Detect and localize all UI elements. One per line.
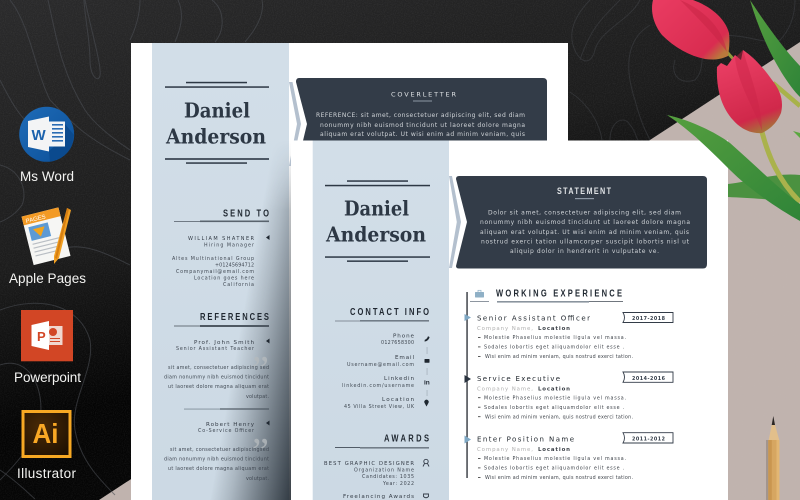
contact info section: 0127658300 (381, 340, 414, 346)
back page references section: Senior Assistant Teacher (176, 346, 254, 352)
lower leaf back (728, 174, 800, 202)
top tulip (652, 0, 729, 60)
job 1: 2017-2018 (632, 316, 666, 322)
label: Illustrator: Illustrator (17, 466, 76, 481)
icon: award ribbon (423, 459, 429, 466)
statement banner: aliquip dolor in hendrerit in vulputate ve. (510, 248, 659, 255)
icon: Powerpoint (21, 310, 73, 361)
front page sidebar (313, 140, 449, 500)
contact info section: Location (382, 397, 414, 403)
job 1: Sodales lobortis eget aliquamdolor elit esse . (484, 344, 624, 350)
job 2: Wisi enim ad minim veniam, quis nostrud exerci tation. (485, 414, 633, 420)
timeline line (466, 292, 468, 478)
back page coverletter banner (296, 78, 547, 170)
back page references section: Robert Henry (206, 422, 255, 428)
job 1 (464, 312, 673, 360)
icon: Powerpoint: P (37, 329, 46, 344)
back resume page (131, 43, 568, 500)
back page name block: Daniel (184, 98, 250, 122)
back page send to section: Hiring Manager (204, 242, 254, 248)
small leaf tip (793, 131, 800, 138)
icon: trophy (424, 494, 428, 498)
statement banner: nonummy nibh euismod tincidunt ut laoreet dolore magna (480, 219, 690, 226)
icon: Apple Pages: PAGES (25, 214, 46, 225)
back page chevron (289, 82, 301, 166)
contact info section: Phone (393, 334, 415, 340)
job 3: Wisi enim ad minim veniam, quis nostrud exerci tation. (485, 475, 633, 481)
awards section: BEST GRAPHIC DESIGNER (324, 461, 414, 467)
front page chevron (449, 176, 461, 268)
job 2: Sodales lobortis eget aliquamdolor elit esse . (484, 405, 624, 411)
back page send to section: WILLIAM SHATNER (188, 236, 255, 242)
job 2: Location (538, 386, 570, 392)
job 3 (464, 433, 673, 481)
working experience section (464, 288, 673, 481)
back page name block (165, 82, 269, 164)
back page references section: diam nonummy nibh euismod tincidunt (164, 374, 269, 380)
icon: linkedin: in (424, 380, 430, 386)
statement banner: Dolor sit amet, consectetuer adipiscing elit, sed diam (488, 210, 681, 217)
back page references section: Co-Service Officer (198, 428, 254, 434)
contact info section (335, 306, 430, 410)
tulips and leaves (652, 0, 800, 221)
job 3: 2011-2012 (632, 436, 665, 442)
awards section: Year: 2022 (382, 481, 414, 487)
statement banner: STATEMENT (557, 186, 611, 196)
awards section: AWARDS (384, 433, 429, 444)
label: Powerpoint: Powerpoint (14, 370, 81, 385)
main stem (762, 132, 800, 202)
back page references section: Prof. John Smith (194, 340, 254, 346)
front resume page (291, 140, 728, 500)
working experience section: WORKING EXPERIENCE (496, 288, 622, 299)
contact info section: Email (395, 355, 414, 361)
back page coverletter banner: COVERLETTER (391, 90, 456, 98)
statement banner: aliquam erat volutpat. Ut wisi enim ad minim veniam, quis (480, 229, 689, 236)
front page name block: Anderson (325, 223, 426, 247)
icon: envelope (424, 359, 430, 363)
back page send to section: Altes Multinational Group (172, 256, 254, 262)
icon: Illustrator (23, 412, 70, 456)
icon: Apple Pages (22, 207, 71, 265)
job 3: Enter Position Name (477, 436, 574, 444)
quote mark 2: ” (252, 431, 269, 473)
lower tulip (717, 50, 782, 133)
icon: Ms Word (19, 107, 74, 162)
icon: phone (424, 336, 430, 342)
job 3: Location (538, 447, 570, 453)
back page send to section: California (223, 282, 254, 288)
job 1: Molestie Phaselius molestie ligula vel massa. (484, 335, 626, 341)
back page send to section (172, 207, 270, 288)
contact info section: 45 Villa Street View, UK (344, 404, 415, 410)
awards section: Candidates: 1035 (362, 474, 414, 480)
back page references section: volutpat. (246, 476, 269, 482)
back page references section: REFERENCES (200, 311, 269, 322)
awards section: Freelancing Awards (343, 494, 414, 500)
job 2: Molestie Phaselius molestie ligula vel massa. (484, 395, 626, 401)
statement banner (456, 176, 707, 268)
front page name block: Daniel (344, 196, 409, 220)
large leaf (667, 115, 800, 221)
job 1: Location (538, 326, 570, 332)
label: Ms Word: Ms Word (20, 169, 74, 184)
contact info section: linkedin.com/username (342, 383, 414, 389)
back page send to section: Companymail@email.com (176, 269, 254, 275)
front page name block (325, 180, 430, 262)
job 1: Wisi enim ad minim veniam, quis nostrud exerci tation. (485, 354, 633, 360)
back page name block: Anderson (165, 125, 266, 149)
pencil (766, 416, 780, 500)
job 2: Company Name, (477, 386, 533, 392)
icon: Illustrator: Ai (32, 418, 58, 449)
job 1: Company Name, (477, 326, 533, 332)
top right leaf (750, 0, 800, 97)
back page references section: volutpat. (246, 394, 269, 400)
job 2: 2014-2016 (632, 376, 666, 382)
job 3: Sodales lobortis eget aliquamdolor elit esse . (484, 466, 624, 472)
contact info section: Linkedin (384, 376, 414, 382)
label: Apple Pages: Apple Pages (9, 271, 86, 286)
back page sidebar (152, 43, 289, 500)
awards section (324, 433, 429, 500)
back page references section: sit amet, consectetuer adipiscingsed (170, 447, 269, 453)
front page cast shadow (214, 155, 291, 500)
job 2: Service Executive (477, 375, 560, 383)
back page send to section: SEND TO (223, 207, 269, 219)
job 2 (464, 372, 673, 420)
quote mark 1: ” (252, 349, 269, 391)
contour line pattern (0, 0, 263, 499)
back page references section: ut laoreet dolore magna aliquam erat (168, 466, 269, 472)
contact info section: CONTACT INFO (350, 306, 429, 317)
job 3: Company Name, (477, 447, 533, 453)
contour line pattern right (570, 0, 795, 140)
back page references section: sit amet, consectetuer adipiscing sed (168, 365, 269, 371)
back page coverletter banner: REFERENCE: sit amet, consectetuer adipiscing elit, sed diam (316, 112, 525, 119)
back page references section: diam nonummy nibh euismod tincidunt (164, 456, 269, 462)
job 1: Senior Assistant Officer (477, 314, 590, 322)
awards section: Organization Name (354, 468, 414, 474)
stems (727, 52, 800, 106)
icon: Ms Word: W (32, 127, 46, 144)
back page references section: ut laoreet dolore magna aliquam erat (168, 384, 269, 390)
back page coverletter banner: nonummy nibh euismod tincidunt ut laoreet dolore magna (320, 122, 525, 129)
back page coverletter banner: aliquam erat volutpat. Ut wisi enim ad minim veniam, quis (320, 131, 525, 138)
job 3: Molestie Phaselius molestie ligula vel massa. (484, 456, 626, 462)
icon: briefcase (475, 290, 484, 298)
back page send to section: Location goes here (194, 276, 254, 282)
contact info section: Username@email.com (347, 362, 414, 368)
statement banner: nostrud exerci tation ullamcorper suscipit lobortis nisl ut (481, 238, 690, 246)
back page references section (164, 311, 270, 482)
back page send to section: +01245694712 (215, 263, 254, 269)
icon: map pin (424, 400, 429, 406)
